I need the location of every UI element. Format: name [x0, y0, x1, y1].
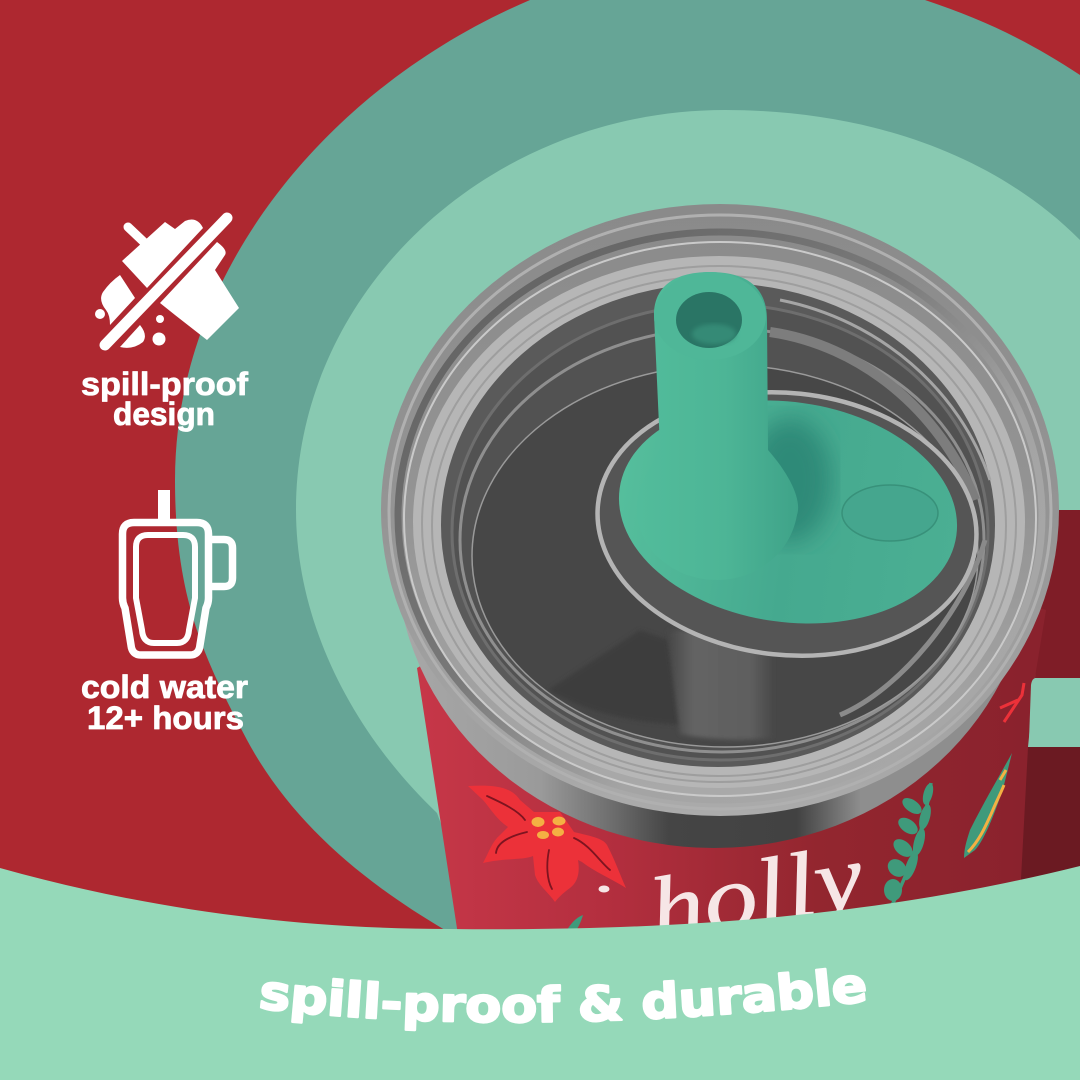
label: cold water 12+ hours: [81, 669, 248, 736]
straw: [128, 227, 147, 245]
lid light ring: [413, 256, 1025, 788]
hand: [160, 242, 239, 340]
splash left: [101, 275, 135, 325]
straw seen through lid: [668, 630, 772, 740]
background: outer teal swirl: [175, 0, 1080, 930]
handle gap: [1029, 678, 1080, 747]
straw: [158, 490, 170, 520]
lid rim highlights: [389, 215, 1051, 809]
cup lid: [122, 220, 203, 288]
disc shadow: [748, 418, 832, 542]
body artwork: red sprig: [1000, 683, 1024, 722]
label: cold water 12+ hours: cold water: [81, 669, 248, 705]
lid floor: [472, 365, 978, 747]
straw stem and foot: [637, 272, 798, 580]
floor shadow wedge: [548, 630, 680, 725]
lid interior: [441, 283, 995, 767]
icon: no spill: [95, 218, 239, 348]
bottom banner: [0, 866, 1080, 1080]
label: cold water 12+ hours: 12+ hours: [87, 700, 244, 736]
droplets: [95, 309, 166, 346]
outer cup: [122, 522, 208, 655]
body artwork: dot: [598, 886, 610, 892]
lid inner glass rings: [452, 304, 988, 760]
body artwork: holly lettering: holly: [642, 824, 870, 962]
handle: [212, 540, 232, 586]
label: spill-proof design: spill-proof: [81, 366, 248, 402]
body artwork: small leaf: [567, 915, 583, 932]
tumbler handle: [1010, 510, 1080, 930]
inner cup: [136, 535, 195, 643]
splash lower: [120, 325, 145, 348]
disc vent button: [842, 485, 938, 541]
tumbler: [381, 204, 1080, 962]
lid ring streaks: [422, 266, 1016, 782]
glass arcs upper right: [770, 300, 990, 715]
lid outer rim: [381, 204, 1059, 816]
steel neck: [396, 262, 1032, 848]
label: spill-proof design: [81, 366, 248, 432]
body artwork: poinsettia: [468, 786, 626, 902]
green silicone disc: [604, 379, 972, 645]
label: spill-proof design: design: [113, 396, 215, 432]
background: inner mint swirl: [296, 110, 1080, 930]
straw hole: [676, 292, 742, 348]
slash: [105, 218, 227, 345]
poinsettia centre dots: [532, 816, 566, 839]
straw mouth: [654, 272, 766, 360]
clear spout ring: [584, 374, 990, 674]
icon: tumbler with handle: [122, 490, 232, 655]
body artwork: green branch: [884, 782, 935, 905]
body artwork: striped leaf: [964, 753, 1012, 858]
banner title: spill-proof & durable: [260, 968, 866, 1032]
tumbler body: [417, 500, 1046, 935]
